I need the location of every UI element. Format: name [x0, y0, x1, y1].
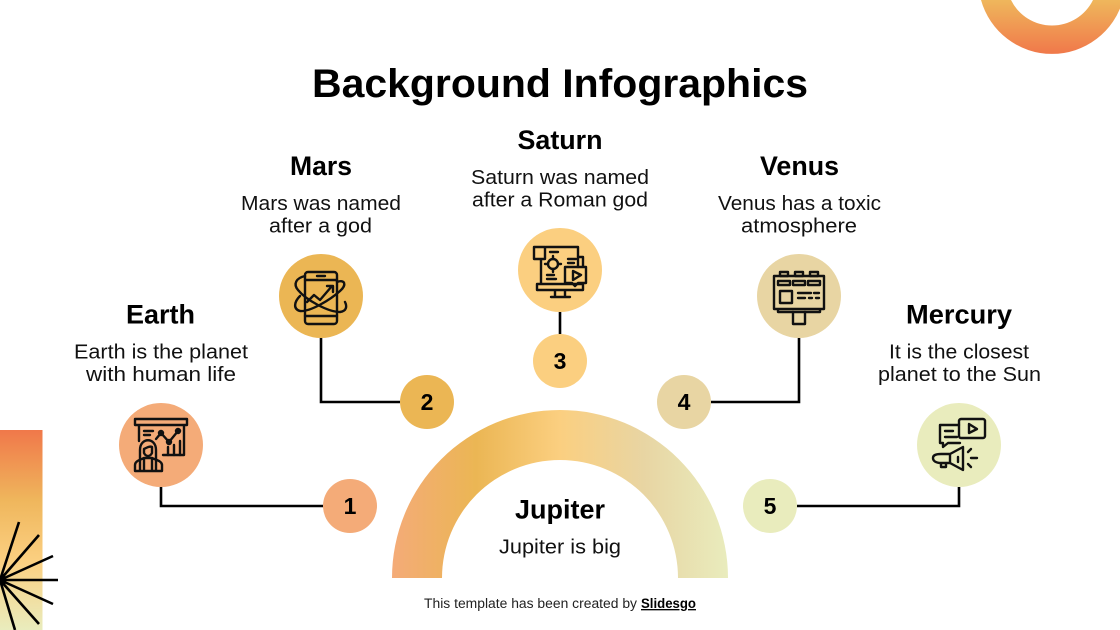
number badge 3: 3 — [554, 348, 566, 374]
heading: Venus: Venus — [760, 151, 839, 181]
number badge 5: 5 — [764, 493, 777, 519]
text: Venus description: Venus has a toxic — [718, 193, 881, 215]
icon circle: Mercury — [917, 403, 1001, 487]
heading: Saturn: Saturn — [518, 125, 602, 155]
panel: Saturn — [471, 125, 649, 312]
arch: gradient half ring — [392, 410, 728, 578]
text: Mercury description — [878, 342, 1041, 386]
icon circle: Earth — [119, 403, 203, 487]
connector: Venus — [711, 338, 799, 402]
connector: Mercury — [797, 487, 959, 506]
text: Venus description — [718, 193, 881, 238]
text: Earth description: Earth is the planet — [74, 342, 248, 364]
icon: presenter with chart — [135, 419, 187, 471]
icon: megaphone with video — [933, 419, 985, 470]
connector: Earth — [161, 487, 323, 506]
icon circle: Saturn — [518, 228, 602, 312]
icon circle: Mars — [279, 254, 363, 338]
number badge 4: 4 — [678, 389, 691, 415]
text: Mars description: after a god — [269, 216, 372, 238]
icon: billboard — [774, 272, 824, 324]
heading: Mars: Mars — [290, 151, 352, 181]
decorative gradient bar bottom left — [0, 430, 42, 630]
text: Saturn description — [471, 167, 649, 212]
text: Venus description: atmosphere — [741, 216, 857, 238]
heading: Jupiter: Jupiter — [515, 494, 605, 524]
icon circle: Venus — [757, 254, 841, 338]
footer credit: Slidesgo — [641, 596, 696, 611]
text: Saturn description: Saturn was named — [471, 167, 649, 189]
footer credit: This template has been created by — [424, 596, 637, 611]
number badge 3 — [533, 334, 587, 388]
number badge 5 — [743, 479, 797, 533]
text: Earth description — [74, 342, 248, 386]
connector: Saturn — [559, 312, 561, 334]
number badge 2: 2 — [421, 389, 433, 415]
text: Saturn description: after a Roman god — [472, 190, 648, 212]
icon: monitor with media — [534, 247, 586, 297]
text: Earth description: with human life — [85, 364, 236, 386]
icon: phone with orbit — [295, 272, 346, 324]
text: Mars description: Mars was named — [241, 193, 401, 215]
connector: Mars — [321, 338, 400, 402]
decorative ring top right — [981, 0, 1120, 54]
number badge 4 — [657, 375, 711, 429]
heading: Earth: Earth — [126, 300, 195, 330]
number badge 2 — [400, 375, 454, 429]
decorative sunburst — [0, 522, 58, 630]
panel: Mars — [241, 151, 401, 338]
number badge 1: 1 — [344, 493, 357, 519]
heading: Mercury: Mercury — [906, 300, 1012, 330]
number badge 1 — [323, 479, 377, 533]
panel: Earth — [74, 300, 248, 487]
text: Mars description — [241, 193, 401, 238]
text: Jupiter description: Jupiter is big — [499, 536, 621, 558]
panel: Venus — [718, 151, 881, 338]
title: Background Infographics — [312, 62, 808, 106]
text: Mercury description: planet to the Sun — [878, 364, 1041, 386]
panel: Mercury — [878, 300, 1041, 487]
text: Mercury description: It is the closest — [889, 342, 1029, 364]
